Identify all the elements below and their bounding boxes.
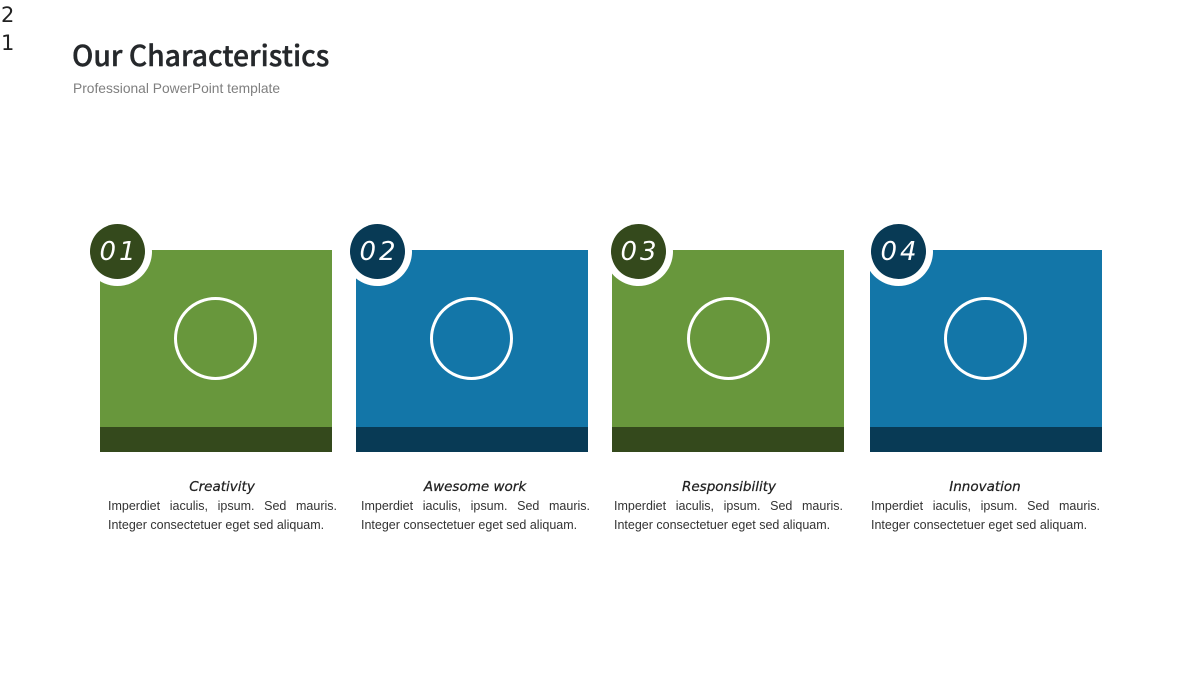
heading: Awesome work: [424, 479, 526, 495]
subtitle: Professional PowerPoint template: [73, 81, 280, 96]
panel: awesome work: [350, 224, 590, 532]
icon ring: [687, 297, 770, 380]
badge 03: 03: [620, 237, 660, 267]
badge 01: [90, 224, 145, 279]
description: Imperdiet iaculis, ipsum. Sed mauris. Integer consectetuer eget sed aliquam.: [614, 499, 843, 532]
green card: [612, 250, 844, 452]
badge 04: 04: [880, 237, 920, 267]
heading: Responsibility: [682, 479, 776, 495]
badge 02: [350, 224, 405, 279]
panel: creativity: [90, 224, 337, 532]
badge halo: [343, 217, 412, 286]
page number: 1: [1, 31, 14, 55]
panel: innovation: [870, 224, 1102, 532]
description: Imperdiet iaculis, ipsum. Sed mauris. Integer consectetuer eget sed aliquam.: [108, 499, 337, 532]
description: Imperdiet iaculis, ipsum. Sed mauris. Integer consectetuer eget sed aliquam.: [361, 499, 590, 532]
title: Our Characteristics: [72, 34, 329, 75]
heading: Innovation: [949, 479, 1021, 495]
badge halo: [604, 217, 673, 286]
page number: [1, 3, 14, 55]
description: Imperdiet iaculis, ipsum. Sed mauris. Integer consectetuer eget sed aliquam.: [871, 499, 1100, 532]
badge 03: [611, 224, 666, 279]
green card: [100, 250, 332, 452]
badge halo: [864, 217, 933, 286]
badge 01: 01: [99, 237, 139, 267]
page number: 2: [1, 3, 14, 27]
panel: responsibility: [611, 224, 844, 532]
badge 04: [871, 224, 926, 279]
icon ring: [174, 297, 257, 380]
heading: Creativity: [189, 479, 255, 495]
blue card: [870, 250, 1102, 452]
badge 02: 02: [359, 237, 399, 267]
icon ring: [944, 297, 1027, 380]
badge halo: [83, 217, 152, 286]
blue card: [356, 250, 588, 452]
icon ring: [430, 297, 513, 380]
